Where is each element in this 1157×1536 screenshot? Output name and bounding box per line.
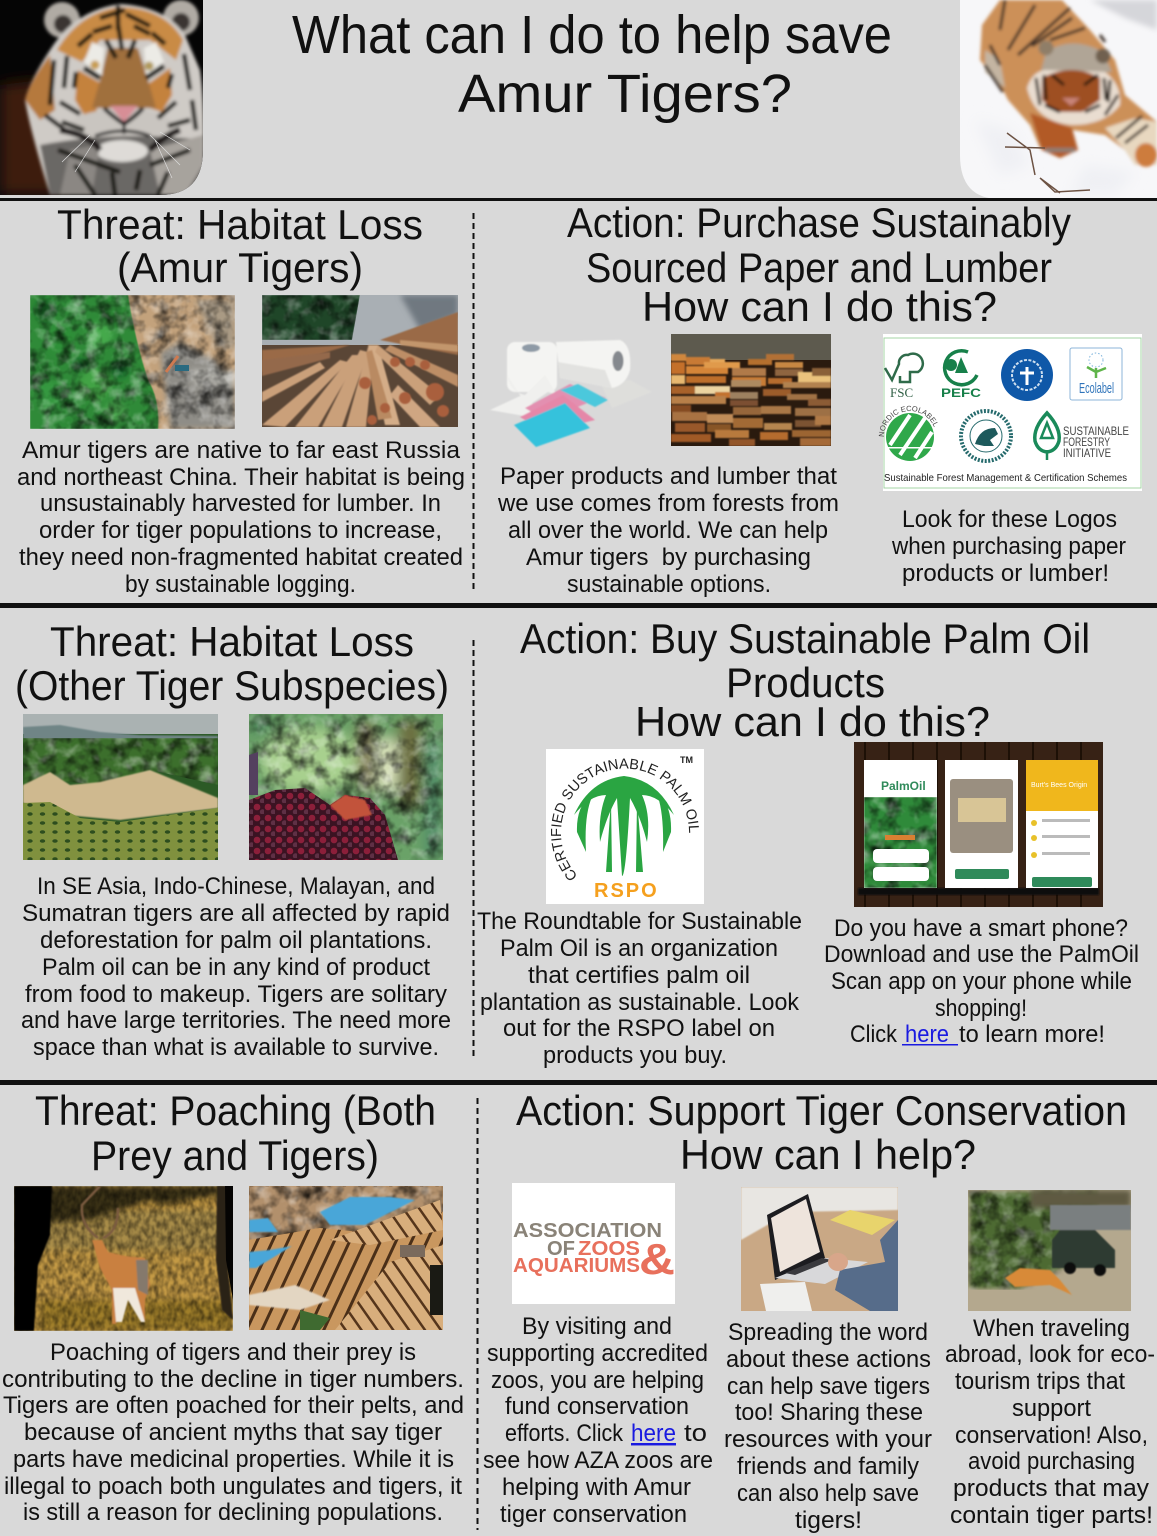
logo: Association of Zoos and Aquariums: [512, 1183, 675, 1304]
text: spreading the word: can help save tigers: [727, 1373, 930, 1400]
logo: Rainforest Alliance: [961, 411, 1011, 461]
text: Amur tiger habitat: order for tiger populations to increase,: [39, 517, 442, 544]
heading: action buy palm oil: Action: Buy Sustainable Palm Oil: [520, 615, 1090, 662]
logo: Blue Angel: [1001, 349, 1053, 401]
caption: certification schemes: Sustainable Forest Management & Certification Schemes: [884, 472, 1127, 484]
text: RSPO roundtable: [477, 908, 802, 1069]
text: PalmOil scan app: Scan app on your phone while: [831, 968, 1132, 995]
text: PalmOil scan app: Download and use the PalmOil: [824, 941, 1139, 968]
logo: FSC: FSC: [890, 385, 913, 400]
photo: eco tourism jeep and tiger: [968, 1190, 1131, 1311]
text: visiting accredited zoos: tiger conservation: [500, 1501, 687, 1528]
panel: action buy sustainable palm oil: [477, 615, 1139, 1069]
photo: tiger crouching in snow: [960, 0, 1157, 199]
text: poaching: because of ancient myths that say tiger: [24, 1419, 442, 1446]
logo: Association of Zoos and Aquariums: AQUARIUMS: [513, 1255, 640, 1277]
text: paper products and lumber: sustainable options.: [567, 571, 771, 598]
text: visiting accredited zoos: zoos, you are helping: [491, 1367, 704, 1394]
text: RSPO roundtable: The Roundtable for Sustainable: [477, 908, 802, 935]
heading: threat habitat loss: Threat: Habitat Loss: [57, 201, 423, 248]
title: [292, 5, 892, 124]
logo: Nordic Ecolabel: NORDIC ECOLABEL: [878, 406, 938, 436]
text: PalmOil scan app: Click: [850, 1021, 898, 1048]
heading: action buy palm oil: How can I do this?: [635, 698, 990, 745]
text: poaching: [2, 1339, 464, 1526]
photo: aerial clearing next to forest: [30, 295, 235, 429]
text: eco-tourism: avoid purchasing: [968, 1448, 1135, 1475]
photo: lumber stacks: [671, 334, 831, 446]
heading: action support conservation: [516, 1087, 1127, 1178]
text: spreading the word: resources with your: [724, 1426, 932, 1453]
app screen: product result: [1026, 760, 1098, 888]
app screen: scan barcode: [945, 760, 1018, 888]
logo: Association of Zoos and Aquariums: ASSOCIATION: [513, 1220, 662, 1242]
title: Amur Tigers?: [458, 64, 792, 124]
heading: threat poaching: Prey and Tigers): [91, 1132, 379, 1179]
text: SE Asia tigers: from food to makeup. Tigers are solitary: [25, 981, 448, 1008]
logo: Sustainable Forestry Initiative: SUSTAINABLE: [1063, 424, 1129, 438]
heading: threat other tiger subspecies: (Other Tiger Subspecies): [15, 662, 449, 709]
heading: action buy palm oil: Products: [726, 659, 885, 706]
text: look for these logos: [891, 506, 1126, 587]
panel: threat habitat loss Amur tigers: [17, 201, 465, 598]
text: paper products and lumber: [497, 463, 839, 598]
text: poaching: illegal to poach both ungulates and tigers, it: [4, 1473, 462, 1500]
text: SE Asia tigers: [21, 873, 451, 1061]
logo: Sustainable Forestry Initiative: [1035, 413, 1129, 460]
text: spreading the word: can also help save: [737, 1480, 919, 1507]
heading: action purchase sustainably: Sourced Paper and Lumber: [586, 244, 1052, 291]
text: PalmOil scan app: to learn more!: [959, 1021, 1105, 1048]
logo: RSPO: RSPO: [594, 880, 659, 902]
text: SE Asia tigers: In SE Asia, Indo-Chinese, Malayan, and: [37, 873, 435, 900]
text: spreading the word: Spreading the word: [728, 1319, 928, 1346]
text: poaching: Tigers are often poached for their pelts, and: [3, 1392, 464, 1419]
text: visiting accredited zoos: helping with Amur: [502, 1474, 691, 1501]
logo: RSPO: TM: [680, 755, 693, 765]
logo: EU Ecolabel: [1070, 348, 1122, 400]
text: spreading the word: friends and family: [737, 1453, 920, 1480]
photo: Amur tiger face: [0, 0, 204, 195]
text: visiting accredited zoos: [483, 1313, 713, 1528]
text: SE Asia tigers: Sumatran tigers are all affected by rapid: [22, 900, 450, 927]
text: RSPO roundtable: plantation as sustainable. Look: [480, 989, 800, 1016]
panel: action support tiger conservation: [483, 1087, 1155, 1534]
text: PalmOil scan app: shopping!: [935, 995, 1027, 1022]
text: SE Asia tigers: Palm oil can be in any kind of product: [42, 954, 430, 981]
text: eco-tourism: [945, 1315, 1155, 1529]
text: PalmOil scan app: [824, 915, 1139, 1048]
text: RSPO roundtable: Palm Oil is an organization: [500, 935, 778, 962]
text: look for these logos: Look for these Logos: [902, 506, 1117, 533]
text: visiting accredited zoos: to: [684, 1420, 707, 1447]
text: visiting accredited zoos: here: [631, 1420, 676, 1447]
text: Amur tiger habitat: by sustainable logging.: [125, 571, 356, 598]
text: Amur tiger habitat: Amur tigers are native to far east Russia: [22, 437, 460, 464]
text: PalmOil scan app: here: [905, 1021, 949, 1048]
text: SE Asia tigers: deforestation for palm oil plantations.: [40, 927, 432, 954]
heading: threat habitat loss: [57, 201, 423, 291]
text: paper products and lumber: Paper products and lumber that: [500, 463, 837, 490]
heading: threat other tiger subspecies: [15, 618, 449, 709]
text: look for these logos: when purchasing paper: [891, 533, 1126, 560]
text: spreading the word: [724, 1319, 932, 1534]
logo: Association of Zoos and Aquariums: OF: [547, 1238, 575, 1260]
photo: confiscated tiger pelts: [249, 1186, 443, 1330]
text: SE Asia tigers: space than what is available to survive.: [33, 1034, 439, 1061]
heading: action support conservation: How can I help?: [680, 1131, 976, 1178]
text: Amur tiger habitat: unsustainably harvested for lumber. In: [40, 490, 441, 517]
logo: FSC: [885, 354, 923, 400]
text: poaching: Poaching of tigers and their prey is: [50, 1339, 416, 1366]
text: paper products and lumber: Amur tigers by purchasing: [526, 544, 811, 571]
logo: Nordic Ecolabel: [878, 406, 938, 461]
logo: Sustainable Forestry Initiative: INITIATIVE: [1063, 446, 1111, 460]
text: RSPO roundtable: out for the RSPO label on: [503, 1015, 775, 1042]
heading: action buy palm oil: [520, 615, 1090, 745]
text: poaching: parts have medicinal properties. While it is: [13, 1446, 454, 1473]
panel: threat poaching: [2, 1087, 464, 1526]
text: spreading the word: too! Sharing these: [735, 1399, 923, 1426]
photo: paper products: [490, 340, 652, 447]
logo: EU Ecolabel: Ecolabel: [1079, 380, 1114, 397]
text: eco-tourism: When traveling: [973, 1315, 1130, 1342]
text: eco-tourism: contain tiger parts!: [950, 1502, 1153, 1529]
text: PalmOil scan app: Do you have a smart phone?: [834, 915, 1128, 942]
heading: threat other tiger subspecies: Threat: Habitat Loss: [50, 618, 414, 665]
panel: action purchase sustainable paper and lumber: [491, 199, 1142, 598]
text: visiting accredited zoos: By visiting and: [522, 1313, 672, 1340]
photo: deer in golden grass: [14, 1186, 233, 1331]
text: Amur tiger habitat: and northeast China. Their habitat is being: [17, 464, 465, 491]
text: eco-tourism: tourism trips that: [955, 1368, 1125, 1395]
text: paper products and lumber: we use comes from forests from: [497, 490, 839, 517]
photo: oil palm fruit: [249, 714, 443, 860]
text: visiting accredited zoos: supporting accredited: [487, 1340, 708, 1367]
text: look for these logos: products or lumber!: [902, 560, 1109, 587]
heading: threat poaching: Threat: Poaching (Both: [35, 1087, 436, 1134]
heading: action purchase sustainably: How can I do this?: [642, 283, 997, 330]
text: eco-tourism: products that may: [953, 1475, 1150, 1502]
heading: action purchase sustainably: Action: Purchase Sustainably: [567, 199, 1071, 246]
heading: threat poaching: [35, 1087, 436, 1179]
heading: threat habitat loss: (Amur Tigers): [117, 244, 363, 291]
text: RSPO roundtable: that certifies palm oil: [528, 962, 750, 989]
text: visiting accredited zoos: fund conservation: [505, 1393, 689, 1420]
text: spreading the word: tigers!: [795, 1507, 862, 1534]
text: poaching: contributing to the decline in tiger numbers.: [2, 1366, 464, 1393]
text: poaching: is still a reason for declining populations.: [23, 1499, 443, 1526]
logo: Association of Zoos and Aquariums: &: [639, 1235, 675, 1284]
app screen: PalmOil home: [864, 760, 937, 888]
photo: stacked logs: [262, 295, 458, 427]
text: visiting accredited zoos: efforts. Click: [505, 1420, 624, 1447]
app screen: PalmOil home: PalmOil: [881, 779, 926, 793]
photo: PalmOil scan app screens: [854, 742, 1103, 907]
text: RSPO roundtable: products you buy.: [543, 1042, 727, 1069]
logo: Association of Zoos and Aquariums: ZOOS: [578, 1238, 640, 1260]
text: spreading the word: about these actions: [726, 1346, 931, 1373]
text: Amur tiger habitat: they need non-fragmented habitat created: [19, 544, 463, 571]
text: paper products and lumber: all over the world. We can help: [508, 517, 828, 544]
text: eco-tourism: support: [1012, 1395, 1091, 1422]
photo: cleared land and palm plantation: [23, 714, 218, 860]
heading: action support conservation: Action: Support Tiger Conservation: [516, 1087, 1127, 1134]
title: What can I do to help save: [292, 5, 892, 65]
text: Amur tiger habitat: [17, 437, 465, 598]
logo: Sustainable Forestry Initiative: FORESTRY: [1063, 435, 1110, 449]
logo: PEFC: PEFC: [941, 386, 981, 400]
panel: threat habitat loss other subspecies: [15, 618, 451, 1061]
logo: PEFC: [941, 351, 981, 400]
text: SE Asia tigers: and have large territories. The need more: [21, 1007, 451, 1034]
logos: forest certification schemes: [878, 334, 1142, 491]
photo: person on laptop: [741, 1187, 898, 1311]
text: eco-tourism: conservation! Also,: [955, 1422, 1148, 1449]
heading: action purchase sustainably: [567, 199, 1071, 330]
text: visiting accredited zoos: see how AZA zoos are: [483, 1447, 713, 1474]
app screen: product result: Burt's Bees Origin: [1031, 782, 1087, 789]
logo: RSPO: CERTIFIED SUSTAINABLE PALM OIL: [551, 758, 699, 880]
